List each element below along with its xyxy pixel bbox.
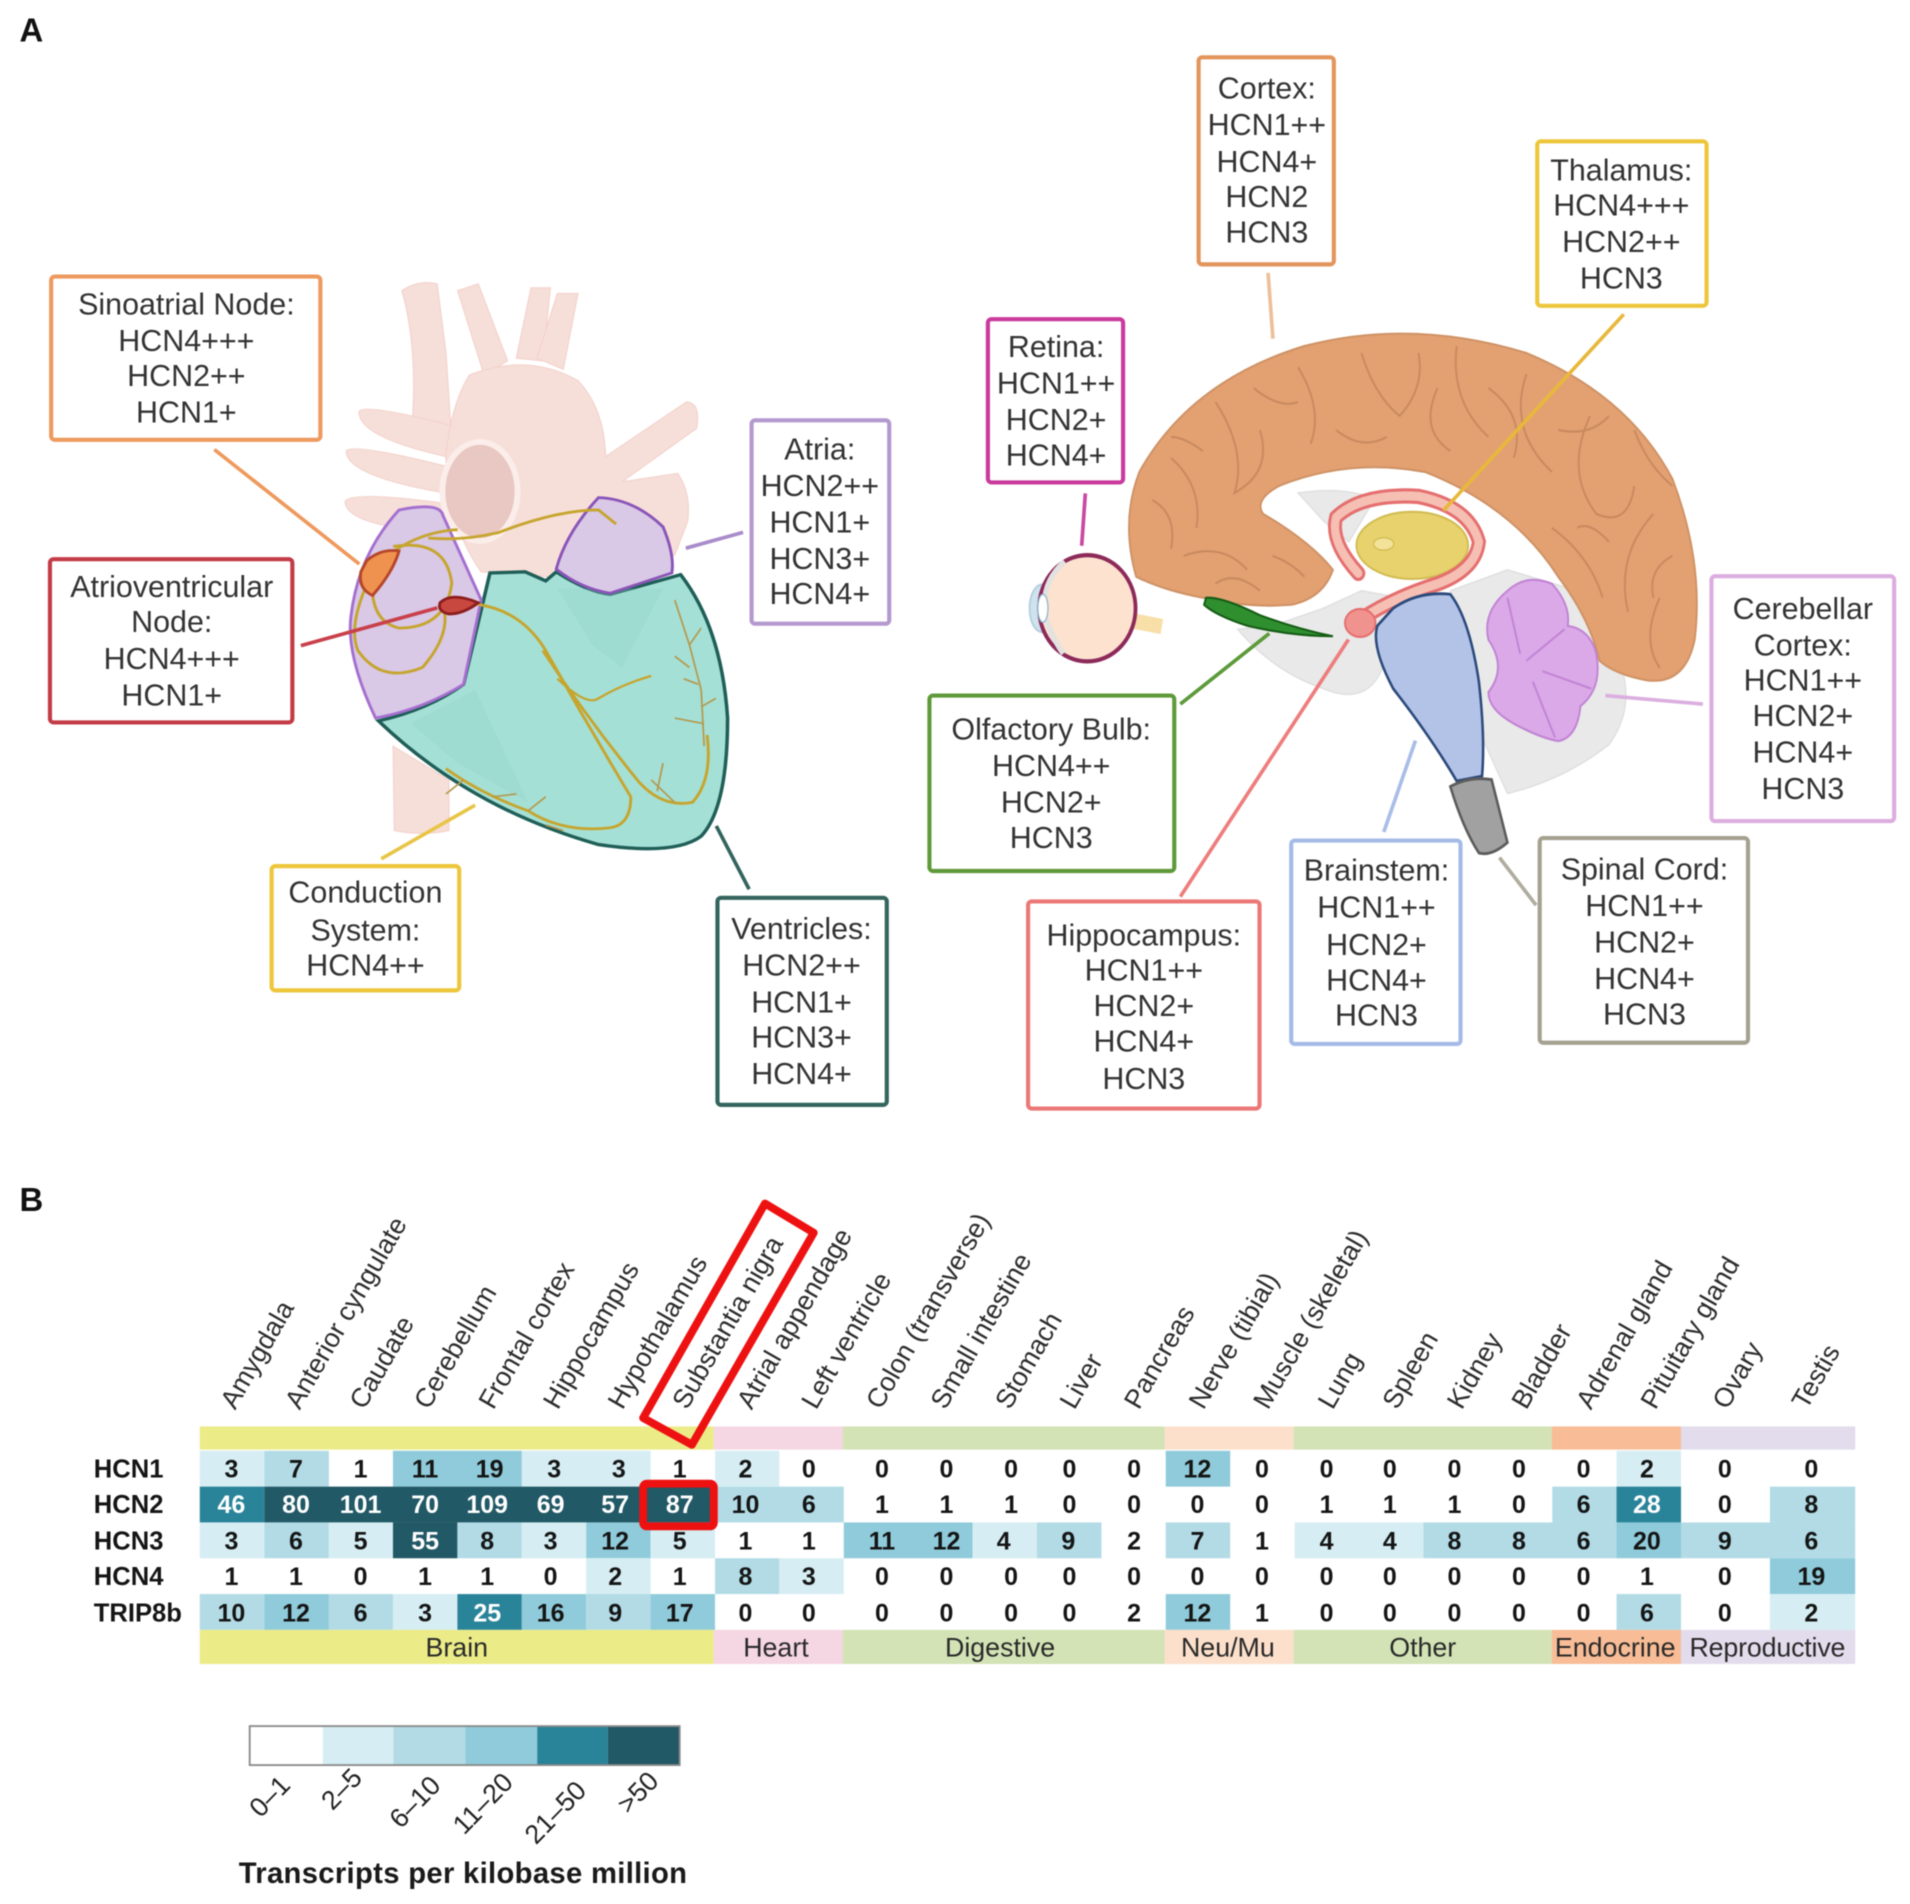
heatmap row: HCN1: 0 (1063, 1456, 1076, 1484)
callout: ventricles: Ventricles: (731, 912, 872, 946)
heatmap row: HCN3: 3 (544, 1527, 558, 1555)
cortex (1129, 334, 1697, 681)
legend tick labels: 6–10 (383, 1770, 446, 1834)
connector: hippocampus (1180, 640, 1348, 897)
callout: spinal cord (1540, 838, 1748, 1043)
heatmap row: HCN3: 12 (601, 1527, 629, 1555)
heatmap row: HCN2: 80 (282, 1491, 310, 1519)
heatmap row: TRIP8b: 0 (802, 1599, 816, 1627)
heatmap row: HCN1: 7 (289, 1456, 303, 1484)
callout: thalamus: HCN4+++ (1553, 189, 1689, 223)
heatmap row: HCN1: 0 (1383, 1456, 1397, 1484)
heatmap row: TRIP8b: 1 (1255, 1599, 1269, 1627)
grey subcortical tissue (1238, 491, 1626, 794)
callout: cerebellar cortex: Cortex: (1754, 628, 1852, 662)
callout: hippocampus (1028, 901, 1260, 1109)
heatmap row: HCN2: 1 (1383, 1491, 1397, 1519)
heatmap row: TRIP8b: 6 (354, 1599, 368, 1627)
callout: ventricles: HCN4+ (751, 1057, 852, 1091)
heatmap row: HCN4: 2 (608, 1563, 622, 1591)
heatmap row: TRIP8b: 2 (1804, 1599, 1818, 1627)
tissue column labels: Muscle (skeletal) (1247, 1225, 1374, 1414)
red highlight: HCN2 substantia nigra cell (643, 1484, 714, 1526)
heatmap row: TRIP8b: 25 (473, 1599, 501, 1627)
heatmap row: HCN4: 1 (1640, 1563, 1654, 1591)
tissue column labels: Colon (transverse) (860, 1208, 996, 1414)
heatmap row: TRIP8b: 0 (1383, 1599, 1397, 1627)
heatmap row: HCN2: 1 (1004, 1491, 1018, 1519)
heatmap row: HCN1: 0 (1447, 1456, 1461, 1484)
heatmap row: HCN3: 5 (673, 1527, 687, 1555)
callout: olfactory bulb: HCN2+ (1001, 786, 1102, 820)
connector: cerebellar cortex (1605, 696, 1703, 704)
heatmap row: HCN2: 87 (666, 1491, 694, 1519)
bottom category band: Other (1389, 1633, 1456, 1663)
tissue column labels: Hypothalamus (602, 1250, 713, 1414)
callout: atrioventricular node: Atrioventricular (70, 570, 273, 604)
heatmap row: TRIP8b: 0 (739, 1599, 752, 1627)
heatmap row: HCN3: 5 (354, 1527, 368, 1555)
brainstem (1376, 594, 1483, 781)
callout: cortex: HCN1++ (1208, 108, 1326, 142)
left atrium (556, 498, 672, 593)
eye (1030, 555, 1163, 661)
heatmap row: HCN1: 2 (739, 1456, 752, 1484)
cerebellum folds (1507, 598, 1591, 738)
callout: atria: HCN1+ (769, 505, 870, 539)
heatmap row: HCN3: 4 (997, 1527, 1011, 1555)
callout: atrioventricular node: HCN1+ (121, 678, 222, 712)
panel A: heart (50, 277, 889, 1105)
heatmap row: TRIP8b: 16 (537, 1599, 564, 1627)
heatmap row: TRIP8b: 0 (1063, 1599, 1076, 1627)
callout: atria: HCN4+ (769, 577, 870, 611)
connector: olfactory bulb (1180, 633, 1269, 704)
heatmap row: HCN2: 28 (1633, 1491, 1661, 1519)
heatmap row: HCN1: 0 (1004, 1456, 1018, 1484)
heatmap row: HCN3: 9 (1061, 1527, 1075, 1555)
connector: thalamus (1443, 314, 1624, 510)
tissue column labels: Anterior cyngulate (279, 1212, 413, 1414)
heatmap row: HCN1: 19 (476, 1456, 504, 1484)
callout: ventricles (717, 898, 887, 1105)
heatmap row: HCN4: 0 (1577, 1563, 1590, 1591)
tissue column labels: Adrenal gland (1570, 1255, 1679, 1414)
heatmap row: TRIP8b: 0 (1004, 1599, 1018, 1627)
callout: brainstem: HCN2+ (1326, 928, 1427, 962)
heatmap row: TRIP8b: 0 (1512, 1599, 1526, 1627)
heatmap row: HCN4: 0 (544, 1563, 558, 1591)
callout: atrioventricular node: Node: (131, 605, 212, 639)
bottom category band (200, 1630, 1855, 1664)
heatmap row: HCN4: 0 (1512, 1563, 1526, 1591)
connector: spinal cord (1499, 858, 1536, 905)
heatmap row: TRIP8b: 0 (875, 1599, 889, 1627)
heart illustration (345, 283, 728, 849)
heatmap row: HCN1: 0 (1255, 1456, 1269, 1484)
callout: hippocampus: HCN2+ (1093, 989, 1194, 1023)
heatmap row: HCN3: 12 (933, 1527, 960, 1555)
callout: cerebellar cortex: HCN4+ (1752, 736, 1853, 770)
thalamus (1356, 512, 1468, 579)
heatmap row: HCN1: 3 (612, 1456, 626, 1484)
callout: spinal cord: HCN1++ (1585, 889, 1704, 923)
callout: olfactory bulb: HCN3 (1010, 821, 1093, 855)
heatmap row: HCN2: 101 (340, 1491, 381, 1519)
heatmap row: HCN2: 1 (875, 1491, 889, 1519)
tissue column labels: Pancreas (1118, 1301, 1201, 1414)
callout: thalamus (1537, 141, 1707, 306)
callout: spinal cord: HCN4+ (1594, 962, 1695, 996)
heatmap row: HCN2: 0 (1718, 1491, 1732, 1519)
heatmap row: HCN1: 1 (354, 1456, 368, 1484)
heatmap row: HCN1: 0 (940, 1456, 953, 1484)
heatmap row: TRIP8b: 17 (666, 1599, 694, 1627)
heatmap row: HCN3: 6 (289, 1527, 303, 1555)
connector: brainstem (1384, 741, 1415, 832)
conduction system (355, 510, 716, 831)
heatmap row: TRIP8b: 10 (218, 1599, 245, 1627)
connector: sinoatrial (214, 450, 359, 564)
callout: conduction system: HCN4++ (306, 949, 425, 983)
connector: ventricles (716, 826, 749, 889)
callout: hippocampus: Hippocampus: (1047, 918, 1241, 952)
panel B: heatmap (94, 1204, 1855, 1664)
olfactory bulb (1204, 598, 1333, 636)
callout: conduction system: Conduction (288, 876, 442, 910)
heatmap row: HCN4: 0 (1127, 1563, 1141, 1591)
callout: sinoatrial node (51, 277, 320, 440)
heatmap row: HCN3: 1 (1255, 1527, 1269, 1555)
heatmap row: HCN3: 9 (1718, 1527, 1732, 1555)
heatmap row: HCN2: 0 (1190, 1491, 1204, 1519)
heatmap row: TRIP8b: 2 (1127, 1599, 1141, 1627)
callout: cerebellar cortex: HCN1++ (1744, 664, 1862, 698)
panel letter B: B (19, 1181, 43, 1218)
aortic opening (442, 442, 518, 541)
connector: conduction (381, 805, 475, 859)
heatmap row: HCN4: 1 (224, 1563, 238, 1591)
heatmap row: TRIP8b: 3 (418, 1599, 432, 1627)
heatmap row: TRIP8b: 12 (282, 1599, 310, 1627)
heatmap row: HCN3: 8 (480, 1527, 494, 1555)
connector: atria (686, 532, 743, 548)
callout: sinoatrial node: HCN4+++ (118, 324, 254, 358)
callout: retina: HCN2+ (1006, 403, 1106, 437)
heatmap row: HCN4: 0 (1383, 1563, 1397, 1591)
callout: atria: HCN3+ (769, 542, 870, 576)
callout: sinoatrial node: HCN1+ (136, 396, 237, 430)
heatmap row: HCN4 (94, 1558, 1855, 1594)
callout: spinal cord: HCN3 (1603, 997, 1686, 1031)
heatmap row: HCN2: 0 (1512, 1491, 1526, 1519)
red highlight: substantia nigra label (643, 1204, 814, 1445)
heatmap row: HCN2: 6 (1577, 1491, 1590, 1519)
heatmap row: HCN2: 6 (802, 1491, 816, 1519)
heatmap row: HCN2 (94, 1487, 1855, 1522)
heatmap row: TRIP8b: 0 (1447, 1599, 1461, 1627)
cortex folds (1152, 346, 1672, 668)
heatmap row: HCN4: 0 (875, 1563, 889, 1591)
tissue column labels: Caudate (343, 1311, 420, 1414)
tissue column labels: Stomach (989, 1307, 1068, 1414)
bottom category band: Endocrine (1555, 1633, 1676, 1663)
heatmap row: HCN3: 1 (739, 1527, 753, 1555)
heatmap row: HCN2: 0 (1255, 1491, 1269, 1519)
callout: retina: HCN1++ (997, 366, 1115, 400)
legend tick labels (243, 1763, 664, 1850)
heatmap row: HCN1: 11 (412, 1456, 438, 1484)
callout: olfactory bulb: Olfactory Bulb: (951, 712, 1151, 746)
legend (239, 1726, 687, 1890)
callout: cortex: HCN2 (1225, 180, 1308, 214)
legend colour scale (250, 1726, 680, 1765)
heatmap row: HCN1: 1 (673, 1456, 687, 1484)
tissue column labels (214, 1208, 1846, 1414)
heatmap row: TRIP8b (94, 1594, 1855, 1630)
heatmap row: HCN4: 1 (418, 1563, 432, 1591)
tissue column labels: Liver (1054, 1348, 1109, 1414)
heatmap row: HCN1: 2 (1640, 1456, 1654, 1484)
heatmap row: HCN1: 0 (875, 1456, 889, 1484)
callout: ventricles: HCN1+ (751, 985, 852, 1019)
legend tick labels: 21–50 (519, 1775, 592, 1850)
heatmap row: HCN1: 0 (802, 1456, 816, 1484)
callout: hippocampus: HCN1++ (1085, 954, 1203, 988)
heatmap row: HCN4: 1 (289, 1563, 303, 1591)
callout: atrioventricular node: HCN4+++ (104, 642, 240, 676)
tissue column labels: Nerve (tibial) (1183, 1267, 1285, 1414)
callout: spinal cord: Spinal Cord: (1561, 853, 1728, 887)
heatmap row: HCN2: 1 (1320, 1491, 1334, 1519)
heatmap row: HCN4: 8 (739, 1563, 753, 1591)
tissue column labels: Hippocampus (537, 1257, 645, 1414)
heatmap row: HCN3: 4 (1320, 1527, 1334, 1555)
connector: cortex (1268, 273, 1273, 339)
bottom category band: Digestive (945, 1633, 1055, 1663)
callout: brainstem: HCN4+ (1326, 963, 1427, 997)
heatmap row: TRIP8b: TRIP8b (94, 1599, 182, 1627)
heatmap row: HCN1: 0 (1718, 1456, 1732, 1484)
heatmap row: HCN2: 1 (1447, 1491, 1461, 1519)
heatmap row: HCN1: 0 (1577, 1456, 1590, 1484)
heatmap row: HCN1: 12 (1184, 1456, 1211, 1484)
callout: atria: Atria: (784, 432, 855, 466)
callout: brainstem: HCN1++ (1317, 890, 1436, 924)
heatmap row: HCN4: 19 (1797, 1563, 1825, 1591)
callout: brainstem (1291, 841, 1461, 1044)
heatmap row: HCN4: 0 (1004, 1563, 1018, 1591)
heatmap row: HCN3: HCN3 (94, 1527, 163, 1555)
tissue column labels: Left ventricle (795, 1267, 897, 1414)
heatmap row: HCN2: HCN2 (94, 1491, 163, 1519)
heatmap row: HCN4: 3 (802, 1563, 816, 1591)
heatmap row: HCN3: 2 (1127, 1527, 1141, 1555)
heatmap row: HCN3: 8 (1447, 1527, 1461, 1555)
heatmap row: HCN2: 69 (537, 1491, 564, 1519)
callout: brainstem: HCN3 (1335, 999, 1418, 1033)
bottom category band: Reproductive (1690, 1633, 1845, 1663)
callout: cortex: HCN3 (1225, 215, 1308, 249)
bottom category band: Heart (743, 1633, 809, 1663)
heatmap row: TRIP8b: 0 (1718, 1599, 1732, 1627)
heatmap row: HCN1: 0 (1320, 1456, 1333, 1484)
callout: hippocampus: HCN4+ (1093, 1024, 1194, 1058)
callout: cerebellar cortex: Cerebellar (1733, 592, 1873, 626)
top category band (200, 1426, 1855, 1450)
legend tick labels: >50 (611, 1766, 664, 1819)
tissue column labels: Testis (1786, 1339, 1846, 1414)
callout: cerebellar cortex: HCN3 (1761, 772, 1844, 806)
tissue column labels: Ovary (1706, 1336, 1768, 1414)
heatmap row: HCN1 (94, 1451, 1818, 1487)
heatmap row: HCN1: 0 (1512, 1456, 1526, 1484)
tissue column labels: Pituitary gland (1635, 1252, 1745, 1414)
brain illustration (1030, 334, 1697, 854)
tissue column labels: Lung (1312, 1347, 1368, 1414)
tissue column labels: Small intestine (924, 1248, 1038, 1414)
tissue column labels: Cerebellum (408, 1280, 502, 1414)
heatmap row: HCN1: HCN1 (94, 1456, 163, 1484)
heatmap row: TRIP8b: 0 (1577, 1599, 1590, 1627)
heatmap row: HCN4: 0 (1718, 1563, 1732, 1591)
heatmap row: HCN2: 10 (732, 1491, 759, 1519)
sinoatrial node (360, 551, 399, 595)
heatmap row: HCN3 (94, 1522, 1855, 1558)
callout: cerebellar cortex: HCN2+ (1752, 699, 1853, 733)
tissue column labels: Atrial appendage (731, 1223, 858, 1414)
heatmap row: HCN4: 1 (673, 1563, 687, 1591)
legend title: Transcripts per kilobase million (239, 1858, 687, 1890)
tissue column labels: Spleen (1376, 1326, 1444, 1414)
heatmap row: TRIP8b: 9 (608, 1599, 622, 1627)
connector: retina (1082, 493, 1085, 546)
heatmap row: HCN2: 8 (1804, 1491, 1818, 1519)
pale great vessels (345, 283, 698, 833)
heatmap row: HCN2: 57 (601, 1491, 629, 1519)
atrioventricular node (439, 597, 478, 614)
heatmap row: TRIP8b: 0 (1320, 1599, 1333, 1627)
callout: sinoatrial node: HCN2++ (127, 359, 246, 393)
heatmap row: HCN3: 6 (1804, 1527, 1818, 1555)
heatmap row: HCN2: 70 (411, 1491, 439, 1519)
tissue column labels: Kidney (1441, 1327, 1508, 1414)
hippocampus (1335, 496, 1479, 637)
heatmap row: HCN3: 20 (1633, 1527, 1661, 1555)
heatmap row: HCN3: 3 (224, 1527, 238, 1555)
heatmap row: HCN1: 0 (1127, 1456, 1141, 1484)
heatmap row: HCN4: 0 (940, 1563, 953, 1591)
callout: thalamus: Thalamus: (1550, 153, 1692, 187)
bottom category band: Brain (426, 1633, 488, 1663)
callout: cortex: HCN4+ (1217, 145, 1317, 179)
legend tick labels: 0–1 (243, 1770, 296, 1823)
callout: atria: HCN2++ (761, 469, 879, 503)
heatmap row: HCN2: 109 (466, 1491, 508, 1519)
callout: olfactory bulb: HCN4++ (992, 749, 1110, 783)
callout: atria (752, 420, 889, 624)
callout: thalamus: HCN3 (1580, 262, 1663, 296)
tissue column labels: Amygdala (214, 1295, 300, 1414)
tissue column labels: Substantia nigra (666, 1231, 789, 1414)
legend tick labels: 11–20 (447, 1767, 519, 1840)
right atrium (350, 507, 481, 718)
heatmap row: HCN4: 1 (480, 1563, 494, 1591)
ventricles (378, 572, 728, 849)
heatmap row: HCN1: 0 (1804, 1456, 1818, 1484)
callout: conduction system: System: (310, 913, 420, 947)
heatmap row: HCN4: 0 (1447, 1563, 1461, 1591)
heatmap row: HCN4: 0 (1063, 1563, 1076, 1591)
legend tick labels: 2–5 (315, 1763, 368, 1816)
heatmap row: HCN4: 0 (1255, 1563, 1269, 1591)
heatmap row: HCN3: 6 (1577, 1527, 1590, 1555)
heatmap row: HCN3: 7 (1190, 1527, 1204, 1555)
callout: ventricles: HCN2++ (742, 949, 861, 983)
heatmap row: HCN4: 0 (1320, 1563, 1333, 1591)
heatmap row: HCN3: 4 (1383, 1527, 1397, 1555)
heatmap row: HCN1: 3 (547, 1456, 561, 1484)
heatmap row: HCN2: 0 (1127, 1491, 1141, 1519)
tissue column labels: Bladder (1506, 1319, 1578, 1414)
heatmap row: HCN4: HCN4 (94, 1563, 164, 1591)
heatmap row: TRIP8b: 6 (1640, 1599, 1654, 1627)
callout: retina: Retina: (1008, 330, 1104, 364)
heatmap row: HCN3: 1 (802, 1527, 816, 1555)
ventricle shading (411, 589, 663, 802)
bottom category band: Neu/Mu (1181, 1633, 1275, 1663)
callout: cerebellar cortex (1711, 576, 1894, 821)
panel letter A: A (19, 11, 43, 48)
callout: brainstem: Brainstem: (1304, 854, 1449, 888)
callout: cortex (1199, 57, 1334, 264)
panel A: brain (929, 57, 1894, 1109)
callout: thalamus: HCN2++ (1562, 225, 1681, 259)
callout: cortex: Cortex: (1218, 72, 1316, 106)
callout: spinal cord: HCN2+ (1594, 926, 1695, 960)
heatmap row: HCN3: 8 (1512, 1527, 1526, 1555)
heatmap row: TRIP8b: 12 (1184, 1599, 1211, 1627)
heatmap row: HCN1: 3 (224, 1456, 238, 1484)
heatmap row: TRIP8b: 0 (940, 1599, 953, 1627)
heatmap row: HCN3: 11 (869, 1527, 895, 1555)
heatmap row: HCN3: 55 (411, 1527, 439, 1555)
spinal cord (1450, 779, 1507, 854)
heatmap row: HCN4: 0 (1190, 1563, 1204, 1591)
callout: atrioventricular node (50, 559, 292, 722)
heatmap row: HCN2: 46 (218, 1491, 245, 1519)
callout: retina (988, 319, 1123, 482)
connector: atrioventricular (301, 608, 437, 646)
heatmap row: HCN2: 0 (1063, 1491, 1076, 1519)
tissue column labels: Frontal cortex (473, 1256, 581, 1414)
callout: retina: HCN4+ (1006, 438, 1106, 472)
callout: ventricles: HCN3+ (751, 1021, 852, 1055)
callout: sinoatrial node: Sinoatrial Node: (78, 287, 295, 321)
thalamus nucleus (1374, 538, 1394, 550)
cerebellum (1487, 580, 1598, 741)
heatmap row: HCN4: 0 (354, 1563, 368, 1591)
callout: hippocampus: HCN3 (1102, 1062, 1185, 1096)
heatmap row: HCN2: 1 (940, 1491, 954, 1519)
callout: conduction system (272, 866, 459, 990)
callout: olfactory bulb (929, 696, 1174, 871)
